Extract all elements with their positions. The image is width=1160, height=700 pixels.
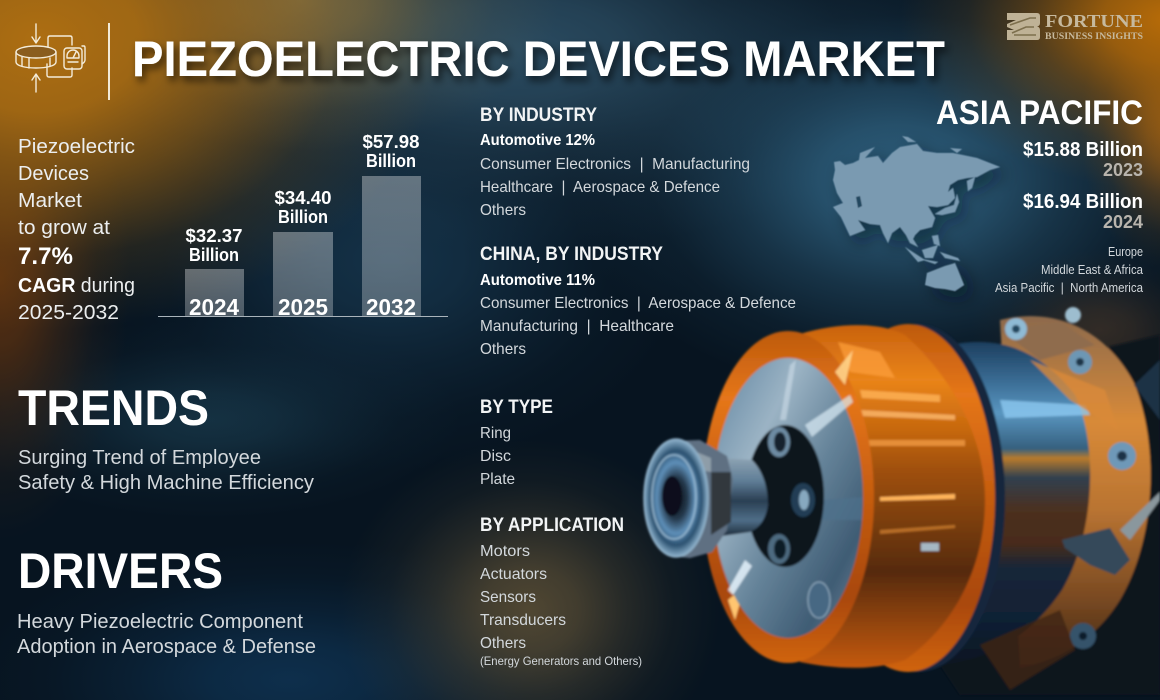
bar chart: market size: 2025 bbox=[278, 294, 328, 320]
bar chart: market size: 2024 bbox=[189, 294, 239, 320]
segment: by application: Sensors bbox=[480, 589, 536, 606]
regional callout: Asia Pacific: $16.94 Billion bbox=[1023, 191, 1143, 213]
CAGR text block: CAGR during bbox=[18, 275, 135, 297]
segment: by type: Disc bbox=[480, 448, 511, 465]
segment: by application: BY APPLICATION bbox=[480, 515, 624, 536]
copper body bbox=[800, 325, 985, 668]
segment: China by industry: Others bbox=[480, 341, 526, 358]
segment: by industry bbox=[480, 105, 750, 219]
bar chart: market size: 2032 bbox=[366, 294, 416, 320]
silver disc bbox=[713, 358, 863, 638]
hex nut bbox=[668, 440, 733, 558]
shaft bbox=[722, 458, 768, 536]
machine: piezoelectric motor image bbox=[644, 307, 1160, 695]
regional callout: Asia Pacific: ASIA PACIFIC bbox=[936, 94, 1143, 132]
rear flange ring bbox=[821, 324, 1005, 672]
segment: by type: Ring bbox=[480, 425, 511, 442]
trends block bbox=[18, 380, 315, 494]
segment: by application: (Energy Generators and Others) bbox=[480, 654, 642, 668]
segment: China by industry: CHINA, BY INDUSTRY bbox=[480, 244, 663, 265]
rear housing bbox=[930, 307, 1160, 695]
segment: by type: Plate bbox=[480, 471, 515, 488]
trends block: TRENDS bbox=[18, 380, 209, 436]
CAGR text block: Market bbox=[18, 190, 82, 212]
CAGR text block: Piezoelectric bbox=[18, 136, 135, 158]
drivers block: DRIVERS bbox=[18, 543, 223, 599]
drivers block: Adoption in Aerospace & Defense bbox=[17, 635, 316, 658]
segment: by application: Motors bbox=[480, 543, 530, 560]
segment: China by industry bbox=[480, 244, 796, 358]
bar chart: market size: Billion bbox=[189, 245, 239, 265]
drivers block bbox=[17, 543, 316, 658]
regional callout: Asia Pacific: $15.88 Billion bbox=[1023, 139, 1143, 161]
logo: Fortune Business Insights bbox=[1007, 11, 1143, 42]
CAGR text block bbox=[18, 136, 135, 324]
bar chart: market size: $34.40 bbox=[274, 188, 332, 208]
trends block: Safety & High Machine Efficiency bbox=[18, 471, 315, 494]
segment: by type: BY TYPE bbox=[480, 397, 553, 418]
bar chart: market size bbox=[158, 132, 448, 320]
CAGR text block: Devices bbox=[18, 163, 89, 185]
segment: by application: Transducers bbox=[480, 612, 566, 629]
segment: by industry: Automotive 12% bbox=[480, 132, 595, 149]
title: PIEZOELECTRIC DEVICES MARKET bbox=[132, 31, 945, 87]
regional callout: Asia Pacific: Europe bbox=[1108, 245, 1143, 259]
segment: by application bbox=[480, 515, 642, 668]
regional callout: Asia Pacific: Asia Pacific | North America bbox=[995, 281, 1143, 295]
segment: China by industry: Manufacturing | Healthcare bbox=[480, 318, 674, 335]
bolts bbox=[1005, 318, 1027, 340]
drivers block: Heavy Piezoelectric Component bbox=[17, 610, 303, 633]
bar chart: market size: $32.37 bbox=[186, 226, 242, 246]
segment: by industry: Consumer Electronics | Manufacturing bbox=[480, 156, 750, 173]
segment: China by industry: Automotive 11% bbox=[480, 272, 595, 289]
segment: by industry: BY INDUSTRY bbox=[480, 105, 597, 126]
segment: by industry: Others bbox=[480, 202, 526, 219]
segment: by application: Actuators bbox=[480, 566, 547, 583]
CAGR text block: 7.7% bbox=[18, 243, 73, 270]
bar chart: market size: $57.98 bbox=[362, 132, 420, 152]
icon: piezo disc with gauge bbox=[16, 24, 85, 92]
front orange ring bbox=[702, 331, 874, 663]
threaded collar and bore bbox=[644, 439, 708, 557]
segment: China by industry: Consumer Electronics | Aerospace & Defence bbox=[480, 295, 796, 312]
map: Asia Pacific bbox=[833, 136, 1000, 291]
logo: Fortune Business Insights: FORTUNE bbox=[1045, 11, 1143, 31]
segment: by type bbox=[480, 397, 553, 488]
CAGR text block: 2025-2032 bbox=[18, 302, 119, 324]
CAGR text block: to grow at bbox=[18, 217, 110, 239]
black hub bbox=[746, 425, 824, 567]
trends block: Surging Trend of Employee bbox=[18, 446, 261, 469]
header divider bbox=[108, 23, 110, 100]
regional callout: Asia Pacific: 2023 bbox=[1103, 160, 1143, 180]
regional callout: Asia Pacific: Middle East & Africa bbox=[1041, 263, 1143, 277]
regional callout: Asia Pacific bbox=[936, 94, 1143, 295]
segment: by application: Others bbox=[480, 635, 526, 652]
bar chart: market size: Billion bbox=[278, 207, 328, 227]
bar chart: market size: Billion bbox=[366, 151, 416, 171]
regional callout: Asia Pacific: 2024 bbox=[1103, 212, 1143, 232]
logo: Fortune Business Insights: BUSINESS INSIGHTS bbox=[1045, 32, 1143, 42]
segment: by industry: Healthcare | Aerospace & Defence bbox=[480, 179, 720, 196]
